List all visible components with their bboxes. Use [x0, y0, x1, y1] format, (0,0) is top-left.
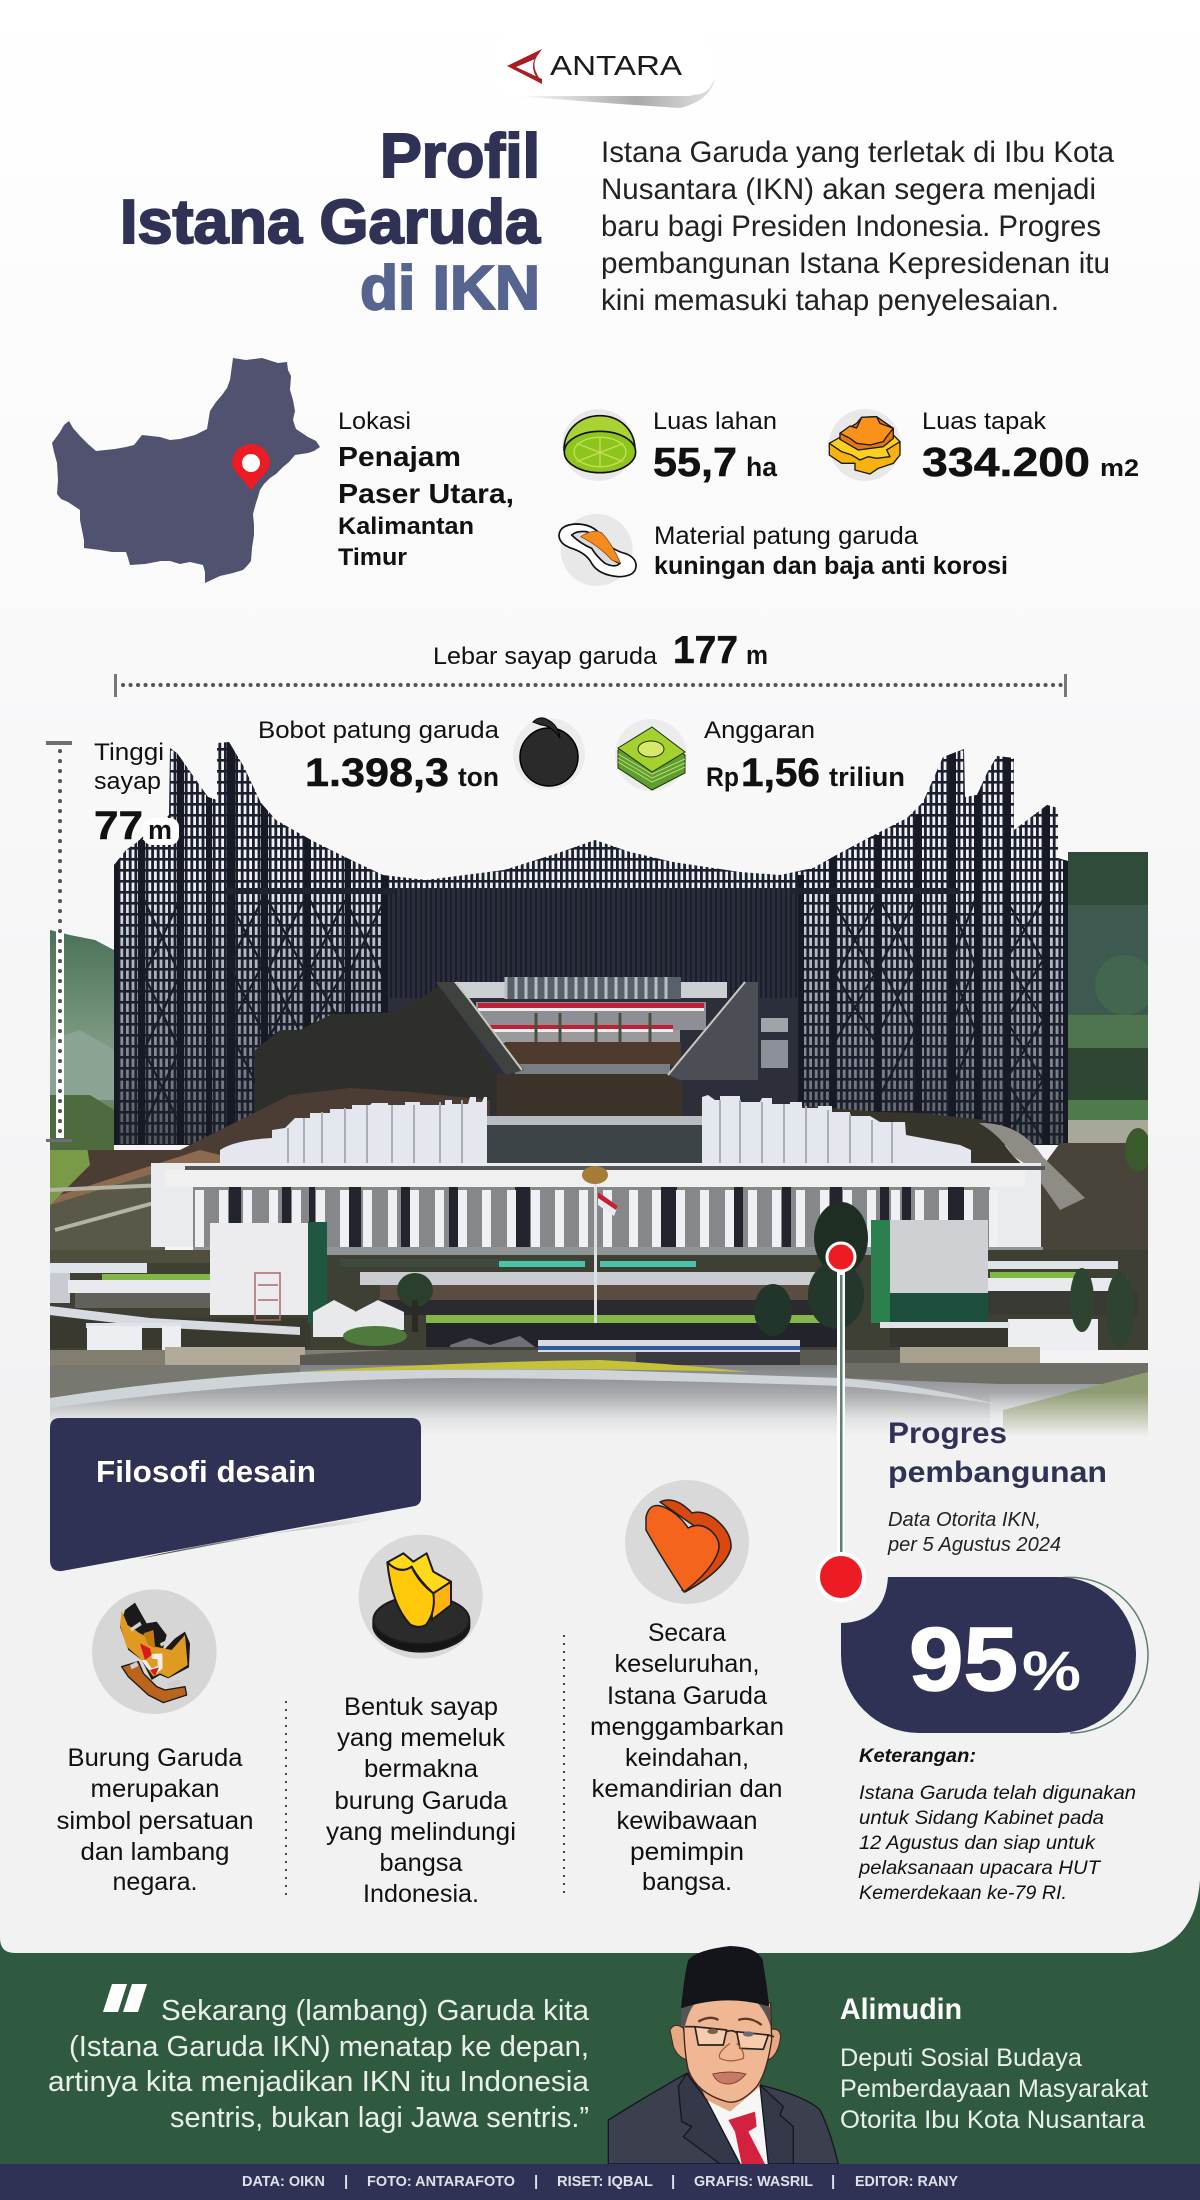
land area text: ha: [746, 452, 778, 482]
weight text: 1.398,3: [305, 751, 449, 795]
progress pill: 95%: 95: [909, 1610, 1018, 1710]
progress heading: [887, 1417, 1107, 1556]
text: Bentuk sayap: [344, 1693, 498, 1721]
icon: garuda emblem: [92, 1589, 217, 1714]
right forest: [1041, 1143, 1148, 1250]
dark bays: [229, 1187, 964, 1249]
icon: money stack: [615, 719, 687, 791]
suit: [608, 2073, 838, 2164]
footer credits: |: [831, 2173, 835, 2190]
scalloped wing left: [220, 1097, 487, 1166]
footer credits: |: [534, 2173, 538, 2190]
footprint text: 334.200: [922, 439, 1090, 485]
middle court: [487, 1125, 702, 1163]
icon: shield on plate: [359, 1535, 483, 1659]
separator 2: [563, 1635, 565, 1897]
text: dan lambang: [80, 1838, 230, 1866]
text: keindahan,: [625, 1744, 749, 1772]
trees: [397, 1273, 433, 1307]
progress pill: 95%: %: [1022, 1639, 1081, 1702]
thick columns: [114, 740, 1068, 1150]
dark slope behind right wing: [700, 1100, 1021, 1163]
text: [326, 1693, 516, 1908]
left lapel: [678, 2073, 740, 2164]
progress notes: 12 Agustus dan siap untuk: [859, 1832, 1096, 1854]
ears: [670, 2025, 781, 2060]
separator 1: [285, 1701, 287, 1897]
glasses: [685, 2027, 774, 2049]
height label: sayap: [94, 768, 161, 795]
speaker details: [840, 1993, 1148, 2134]
text: kewibawaan: [616, 1807, 758, 1835]
text: kemandirian dan: [592, 1775, 782, 1803]
photo: front palace building: [151, 1095, 1045, 1257]
hair: [681, 2002, 771, 2027]
cap: [681, 1946, 769, 2008]
eyes: [707, 2029, 718, 2034]
wingspan label: Lebar sayap garuda: [433, 643, 658, 670]
location text: Lokasi: [338, 408, 411, 435]
icon: heart: [625, 1480, 749, 1604]
tents: [313, 1300, 404, 1337]
location text: [338, 408, 514, 571]
footer credits: [0, 2164, 1200, 2200]
quote: (Istana Garuda IKN) menatap ke depan,: [69, 2031, 589, 2063]
speaker details: Deputi Sosial Budaya: [840, 2044, 1082, 2072]
height dimension scale: [46, 741, 72, 1142]
height label: Tinggi: [94, 739, 164, 766]
location text: Timur: [338, 544, 407, 571]
wingspan label: 177: [673, 629, 738, 672]
footprint text: Luas tapak: [922, 408, 1047, 435]
wingspan dimension line: [114, 674, 1067, 697]
weight text: Bobot patung garuda: [258, 717, 500, 744]
photo: lattice structure: [114, 740, 1070, 1150]
footprint text: m2: [1100, 455, 1139, 482]
logo: ANTARA: ANTARA: [550, 50, 682, 81]
footprint text: [922, 408, 1139, 485]
photo: hills: [50, 852, 1155, 1150]
weight text: [258, 717, 500, 795]
panel heading: Filosofi desain: Filosofi desain: [96, 1454, 316, 1489]
text: Istana Garuda: [607, 1682, 767, 1710]
mouth: [713, 2072, 746, 2084]
budget text: 1,56: [741, 751, 820, 795]
land area text: 55,7: [653, 439, 737, 485]
scalloped wing right: [702, 1095, 971, 1166]
footer credits: |: [344, 2173, 348, 2190]
text: Secara: [648, 1619, 726, 1647]
material text: Material patung garuda: [654, 522, 918, 550]
title: Istana Garuda: [120, 188, 541, 257]
speaker details: Pemberdayaan Masyarakat: [840, 2075, 1148, 2103]
text: keseluruhan,: [614, 1650, 760, 1678]
quote: Sekarang (lambang) Garuda kita: [161, 1995, 590, 2027]
icon: footprint puzzle pieces: [829, 409, 901, 481]
budget text: [704, 717, 905, 795]
quote band background: [0, 1880, 1200, 2165]
location text: Paser Utara,: [338, 478, 514, 509]
text: Indonesia.: [363, 1880, 479, 1908]
height label: 77: [94, 804, 143, 848]
philosophy item 2: [326, 1535, 516, 1908]
title: [120, 122, 541, 323]
intro text: Istana Garuda yang terletak di Ibu Kota: [601, 136, 1114, 169]
main block: [151, 1163, 1041, 1247]
icon: land area dome: [562, 409, 636, 481]
budget text: triliun: [829, 762, 905, 792]
photo: central terraces: [436, 977, 788, 1116]
text: Burung Garuda: [68, 1744, 243, 1772]
speaker details: Alimudin: [840, 1993, 962, 2026]
budget text: Rp: [706, 762, 739, 792]
intro text: pembangunan Istana Kepresidenan itu: [601, 247, 1110, 280]
progress notes: [858, 1745, 1136, 1904]
brows: [698, 2018, 762, 2025]
progress callout line and pins: [818, 1243, 864, 1600]
land area text: [653, 408, 778, 485]
photo: foreground arc and fade: [50, 1360, 1148, 1437]
footer credits: FOTO: ANTARAFOTO: [367, 2173, 515, 2190]
text: bermakna: [364, 1755, 478, 1783]
intro text: baru bagi Presiden Indonesia. Progres: [601, 210, 1101, 243]
neck: [690, 2063, 760, 2117]
photo: mound and dirt: [50, 986, 1148, 1250]
footer credits: RISET: IQBAL: [557, 2173, 653, 2190]
speaker details: Otorita Ibu Kota Nusantara: [840, 2106, 1145, 2134]
white columns: [195, 1190, 998, 1249]
location text: Penajam: [338, 441, 461, 472]
cross braces: [144, 900, 1043, 1140]
flagpole, emblem and flag: [594, 1175, 597, 1323]
height label: [94, 739, 179, 848]
progress heading: Progres: [888, 1417, 1007, 1450]
intro text: [601, 136, 1114, 317]
nose: [719, 2043, 744, 2061]
lower panel background: [0, 1436, 1200, 1953]
text: simbol persatuan: [56, 1807, 254, 1835]
winding road: [979, 1123, 1085, 1210]
text: [590, 1619, 784, 1896]
panel heading: Filosofi desain: [50, 1418, 421, 1571]
white tower right: [871, 1220, 890, 1323]
text: yang melindungi: [326, 1818, 516, 1846]
budget text: Anggaran: [704, 717, 815, 744]
map: Kalimantan with location pin: [52, 358, 320, 583]
text: yang memeluk: [337, 1724, 506, 1752]
photo: Istana Garuda building: [50, 740, 1155, 1437]
footer credits: DATA: OIKN: [242, 2173, 325, 2190]
progress heading: per 5 Agustus 2024: [887, 1534, 1061, 1556]
progress notes: Kemerdekaan ke-79 RI.: [859, 1882, 1067, 1904]
tie: [728, 2112, 765, 2164]
philosophy item 1: [56, 1589, 254, 1896]
right lapel: [760, 2085, 793, 2164]
text: [56, 1744, 254, 1896]
progress notes: untuk Sidang Kabinet pada: [859, 1807, 1104, 1829]
icon: quote mark: [103, 1984, 147, 2012]
text: bangsa.: [642, 1868, 732, 1896]
portrait: Alimudin: [608, 1946, 838, 2164]
height label: m: [148, 815, 172, 845]
face: [683, 1997, 772, 2102]
progress notes: Istana Garuda telah digunakan: [859, 1782, 1136, 1804]
text: pemimpin: [630, 1838, 744, 1866]
icon: black ball: [513, 718, 585, 790]
text: merupakan: [90, 1775, 220, 1803]
land area text: Luas lahan: [653, 408, 777, 435]
footer credits: |: [671, 2173, 675, 2190]
white tower left: [210, 1223, 308, 1315]
weight text: ton: [458, 762, 499, 792]
progress notes: Keterangan:: [859, 1745, 976, 1767]
wingspan label: [433, 629, 768, 672]
quote: sentris, bukan lagi Jawa sentris.”: [170, 2102, 589, 2134]
intro text: kini memasuki tahap penyelesaian.: [601, 284, 1059, 317]
title: di IKN: [360, 254, 540, 323]
intro text: Nusantara (IKN) akan segera menjadi: [601, 173, 1096, 206]
location text: Kalimantan: [338, 513, 474, 540]
progress notes: pelaksanaan upacara HUT: [858, 1857, 1102, 1879]
quote: artinya kita menjadikan IKN itu Indonesia: [48, 2066, 590, 2098]
quote: [48, 1984, 590, 2134]
footer credits: EDITOR: RANY: [855, 2173, 958, 2190]
footer credits: GRAFIS: WASRIL: [694, 2173, 813, 2190]
wingspan label: m: [746, 640, 768, 670]
title: Profil: [380, 122, 540, 191]
logo: ANTARA: [493, 37, 715, 108]
progress heading: pembangunan: [888, 1456, 1107, 1489]
material text: kuningan dan baja anti korosi: [654, 552, 1008, 580]
text: negara.: [112, 1868, 198, 1896]
material text: [654, 522, 1008, 580]
progress heading: Data Otorita IKN,: [888, 1509, 1041, 1531]
photo: forecourt and side wings: [50, 1166, 1148, 1378]
icon: material links: [559, 514, 636, 586]
text: menggambarkan: [590, 1713, 784, 1741]
text: burung Garuda: [334, 1787, 508, 1815]
text: bangsa: [380, 1849, 463, 1877]
philosophy item 3: [590, 1480, 784, 1896]
progress pill: 95%: [841, 1577, 1148, 1733]
shirt: [707, 2087, 768, 2164]
